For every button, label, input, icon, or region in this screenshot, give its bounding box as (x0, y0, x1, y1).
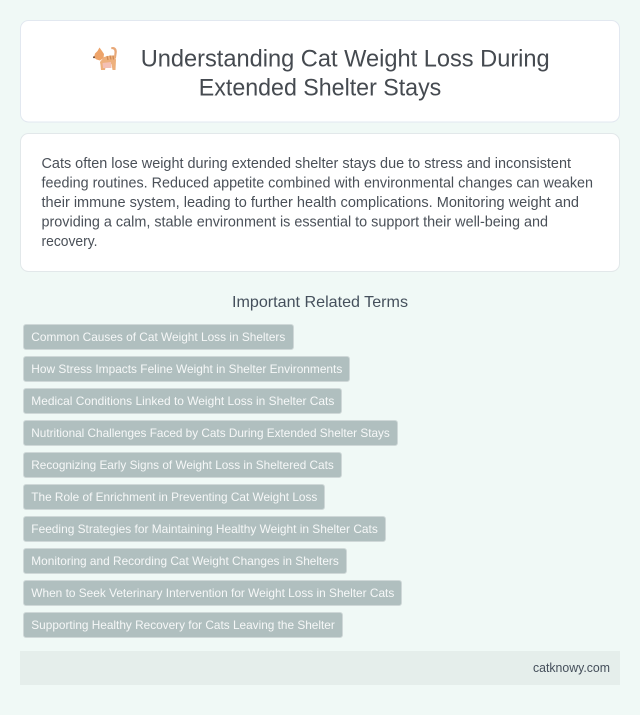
description text (42, 156, 593, 250)
tag 9 (24, 580, 402, 606)
tag 4: Nutritional Challenges Faced by Cats During Extended Shelter Stays (31, 426, 390, 440)
footer (20, 651, 620, 685)
tag 9: When to Seek Veterinary Intervention for Weight Loss in Shelter Cats (31, 586, 394, 600)
tag 2 (24, 356, 350, 382)
tag 10: Supporting Healthy Recovery for Cats Leaving the Shelter (31, 618, 335, 632)
tag 3 (24, 388, 342, 414)
tag 5 (24, 452, 342, 478)
panel: title card (20, 20, 620, 122)
tag 2: How Stress Impacts Feline Weight in Shelter Environments (31, 362, 342, 376)
description text: providing a calm, stable environment is essential to support their well-being and (42, 214, 548, 230)
tag 8: Monitoring and Recording Cat Weight Changes in Shelters (31, 554, 339, 568)
panel: description card (20, 134, 620, 272)
tag 1 (24, 324, 294, 350)
tag 4 (24, 420, 398, 446)
title line 2: Extended Shelter Stays (199, 74, 441, 102)
tag 6 (24, 484, 324, 510)
tag 5: Recognizing Early Signs of Weight Loss in Sheltered Cats (31, 458, 334, 472)
icon: cat (93, 47, 117, 70)
description text: recovery. (42, 234, 98, 250)
description text: their immune system, leading to further health complications. Monitoring weight and (42, 195, 579, 211)
title line 1: Understanding Cat Weight Loss During (141, 46, 550, 72)
tag 6: The Role of Enrichment in Preventing Cat Weight Loss (31, 490, 317, 504)
panel: related terms list (24, 324, 402, 638)
tag 3: Medical Conditions Linked to Weight Loss in Shelter Cats (31, 394, 334, 408)
description text: Cats often lose weight during extended shelter stays due to stress and inconsistent (42, 156, 571, 172)
tag 1: Common Causes of Cat Weight Loss in Shelters (31, 330, 285, 344)
tag 10 (24, 612, 342, 638)
description text: feeding routines. Reduced appetite combined with environmental changes can weaken (42, 176, 593, 192)
tag 8 (24, 548, 346, 574)
tag 7: Feeding Strategies for Maintaining Healthy Weight in Shelter Cats (31, 522, 378, 536)
footer source: catknowy.com (533, 661, 610, 675)
tag 7 (24, 516, 386, 542)
heading: important related terms: Important Related Terms (232, 294, 408, 311)
